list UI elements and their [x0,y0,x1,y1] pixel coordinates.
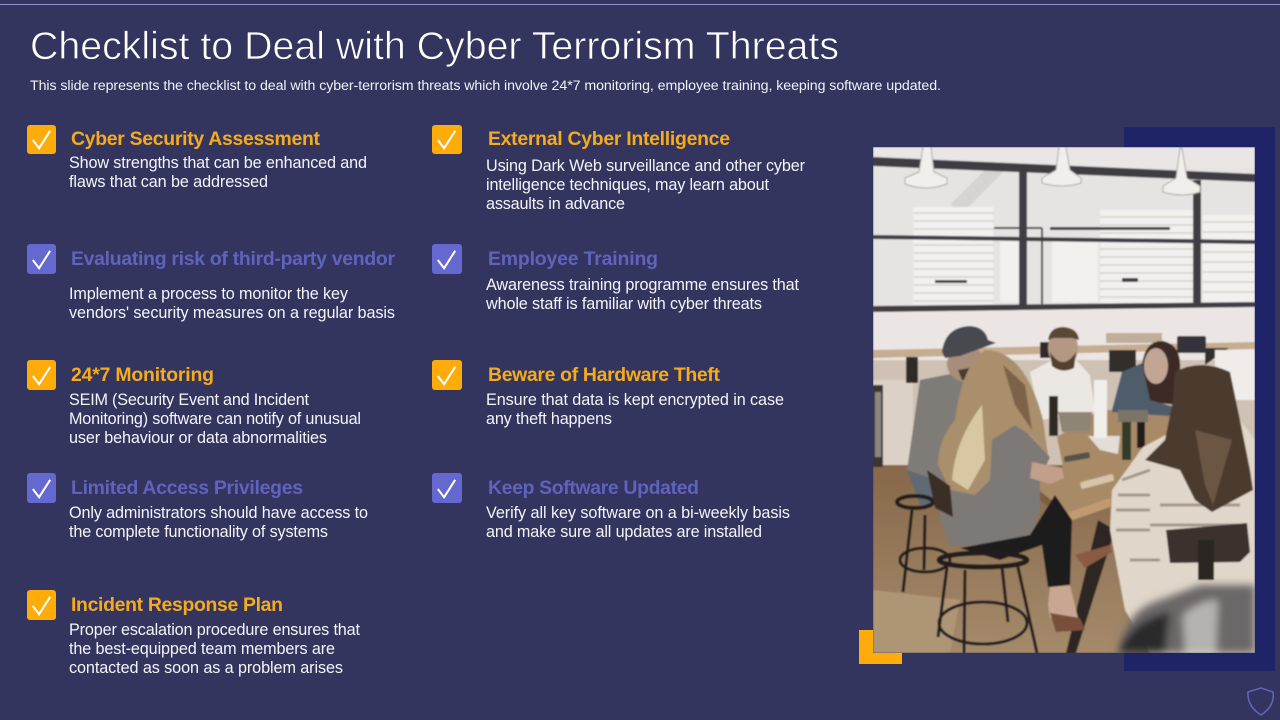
icon: purple checkbox [432,473,462,503]
heading: Keep Software Updated [488,477,699,499]
description: any theft happens [486,410,612,428]
description: Show strengths that can be enhanced and [69,154,367,172]
table [1040,409,1171,513]
heading: External Cyber Intelligence [488,128,730,150]
icon: shield logo [1248,688,1273,715]
description: SEIM (Security Event and Incident [69,391,310,409]
navy photo frame [1124,127,1275,671]
heading: Cyber Security Assessment [71,128,321,150]
description: the complete functionality of systems [69,523,328,541]
woman in denim [1142,341,1180,405]
checklist item: Incident Response Plan [27,590,360,677]
heading: 24*7 Monitoring [71,364,214,386]
floor [873,464,1150,653]
description [69,504,368,541]
blonde woman [940,425,1050,547]
description: intelligence techniques, may learn about [486,176,770,194]
checklist item: Keep Software Updated [432,473,790,541]
pendant lamps [905,147,1200,195]
icon: purple checkbox [27,244,56,274]
description: Monitoring) software can notify of unusual [69,410,361,428]
description [69,285,395,322]
foreground blurred object [1118,585,1255,653]
back wall and shelf [873,312,1255,462]
checklist item: Evaluating risk of third-party vendor [27,244,395,322]
icon: orange checkbox [27,125,56,154]
description [69,154,367,191]
description: and make sure all updates are installed [486,523,762,541]
description: assaults in advance [486,195,625,213]
checklist item: Cyber Security Assessment [27,125,367,191]
icon: orange checkbox [432,125,462,154]
description: flaws that can be addressed [69,173,268,191]
heading: Beware of Hardware Theft [488,364,721,386]
icon: purple checkbox [27,473,56,503]
icon: orange checkbox [27,360,56,390]
description [486,391,784,428]
description: Awareness training programme ensures that [486,276,800,294]
woman with long hair [1110,420,1255,653]
description: Proper escalation procedure ensures that [69,621,360,639]
heading: Evaluating risk of third-party vendor [71,248,395,270]
subtitle: This slide represents the checklist to deal with cyber-terrorism threats which involve 24*7 monitoring, employee training, keeping software updated. [30,78,941,94]
description: whole staff is familiar with cyber threats [485,295,762,313]
icon: purple checkbox [432,244,462,274]
description: Ensure that data is kept encrypted in case [486,391,784,409]
heading: Limited Access Privileges [71,477,303,499]
description: Implement a process to monitor the key [69,285,349,303]
tableware [1094,380,1107,438]
photo: team meeting around a table [873,147,1255,653]
description [486,157,806,213]
icon: orange checkbox [432,360,462,390]
description: Using Dark Web surveillance and other cyber [486,157,806,175]
heading: Incident Response Plan [71,594,283,616]
checklist item: Beware of Hardware Theft [432,360,784,428]
description: the best-equipped team members are [69,640,335,658]
checklist item: Limited Access Privileges [27,473,368,541]
description [486,504,790,541]
description: user behaviour or data abnormalities [69,429,327,447]
stools [897,496,1037,653]
description: Verify all key software on a bi-weekly basis [486,504,790,522]
checklist item: External Cyber Intelligence [432,125,806,213]
icon: orange checkbox [27,590,56,620]
man in cap [906,374,964,482]
description: contacted as soon as a problem arises [69,659,343,677]
description: vendors' security measures on a regular basis [69,304,395,322]
checklist item: 24*7 Monitoring [27,360,361,447]
orange corner accent [859,630,902,664]
man in white tee [1030,358,1095,420]
description [69,621,360,677]
description: Only administrators should have access to [69,504,368,522]
heading: Employee Training [488,248,658,270]
title: Checklist to Deal with Cyber Terrorism Threats [30,25,839,68]
description [69,391,361,447]
checklist item: Employee Training [432,244,800,313]
description [485,276,800,313]
